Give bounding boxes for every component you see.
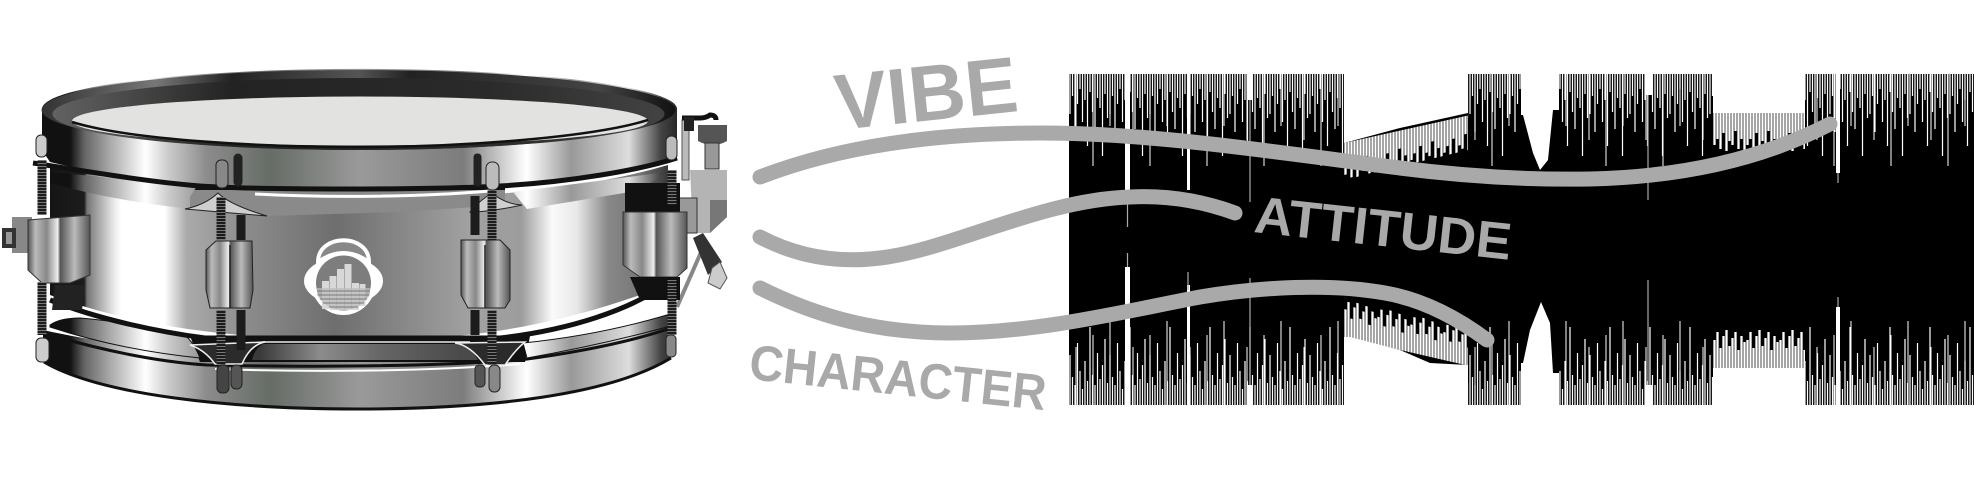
- tension rods: [42, 160, 672, 365]
- hoop lower edge: [33, 158, 677, 189]
- rim: [42, 70, 676, 150]
- snare drum: [2, 69, 727, 410]
- wave line: character: [760, 287, 1487, 340]
- rim inner wall: [52, 78, 664, 150]
- drum head: [72, 96, 648, 146]
- upper claw hoop: [50, 172, 667, 216]
- left bolt: [2, 217, 32, 253]
- logo: [304, 240, 383, 315]
- tension bolts: [36, 135, 677, 393]
- top hoop: [42, 69, 677, 189]
- left lug: [28, 215, 90, 310]
- right side lug: [623, 183, 687, 300]
- wave line: vibe: [760, 124, 1830, 179]
- center right lug: [461, 240, 510, 308]
- strainer mechanism: [677, 115, 727, 307]
- label: CHARACTER: CHARACTER: [747, 334, 1049, 421]
- head edge: [72, 120, 648, 147]
- center left lug: [206, 241, 253, 308]
- shell: [50, 165, 668, 340]
- wave line: attitude: [760, 197, 1235, 260]
- label: VIBE: VIBE: [830, 39, 1022, 147]
- label: ATTITUDE: ATTITUDE: [1252, 186, 1514, 272]
- lower hoop: [43, 283, 671, 410]
- waveform: [1069, 74, 1974, 405]
